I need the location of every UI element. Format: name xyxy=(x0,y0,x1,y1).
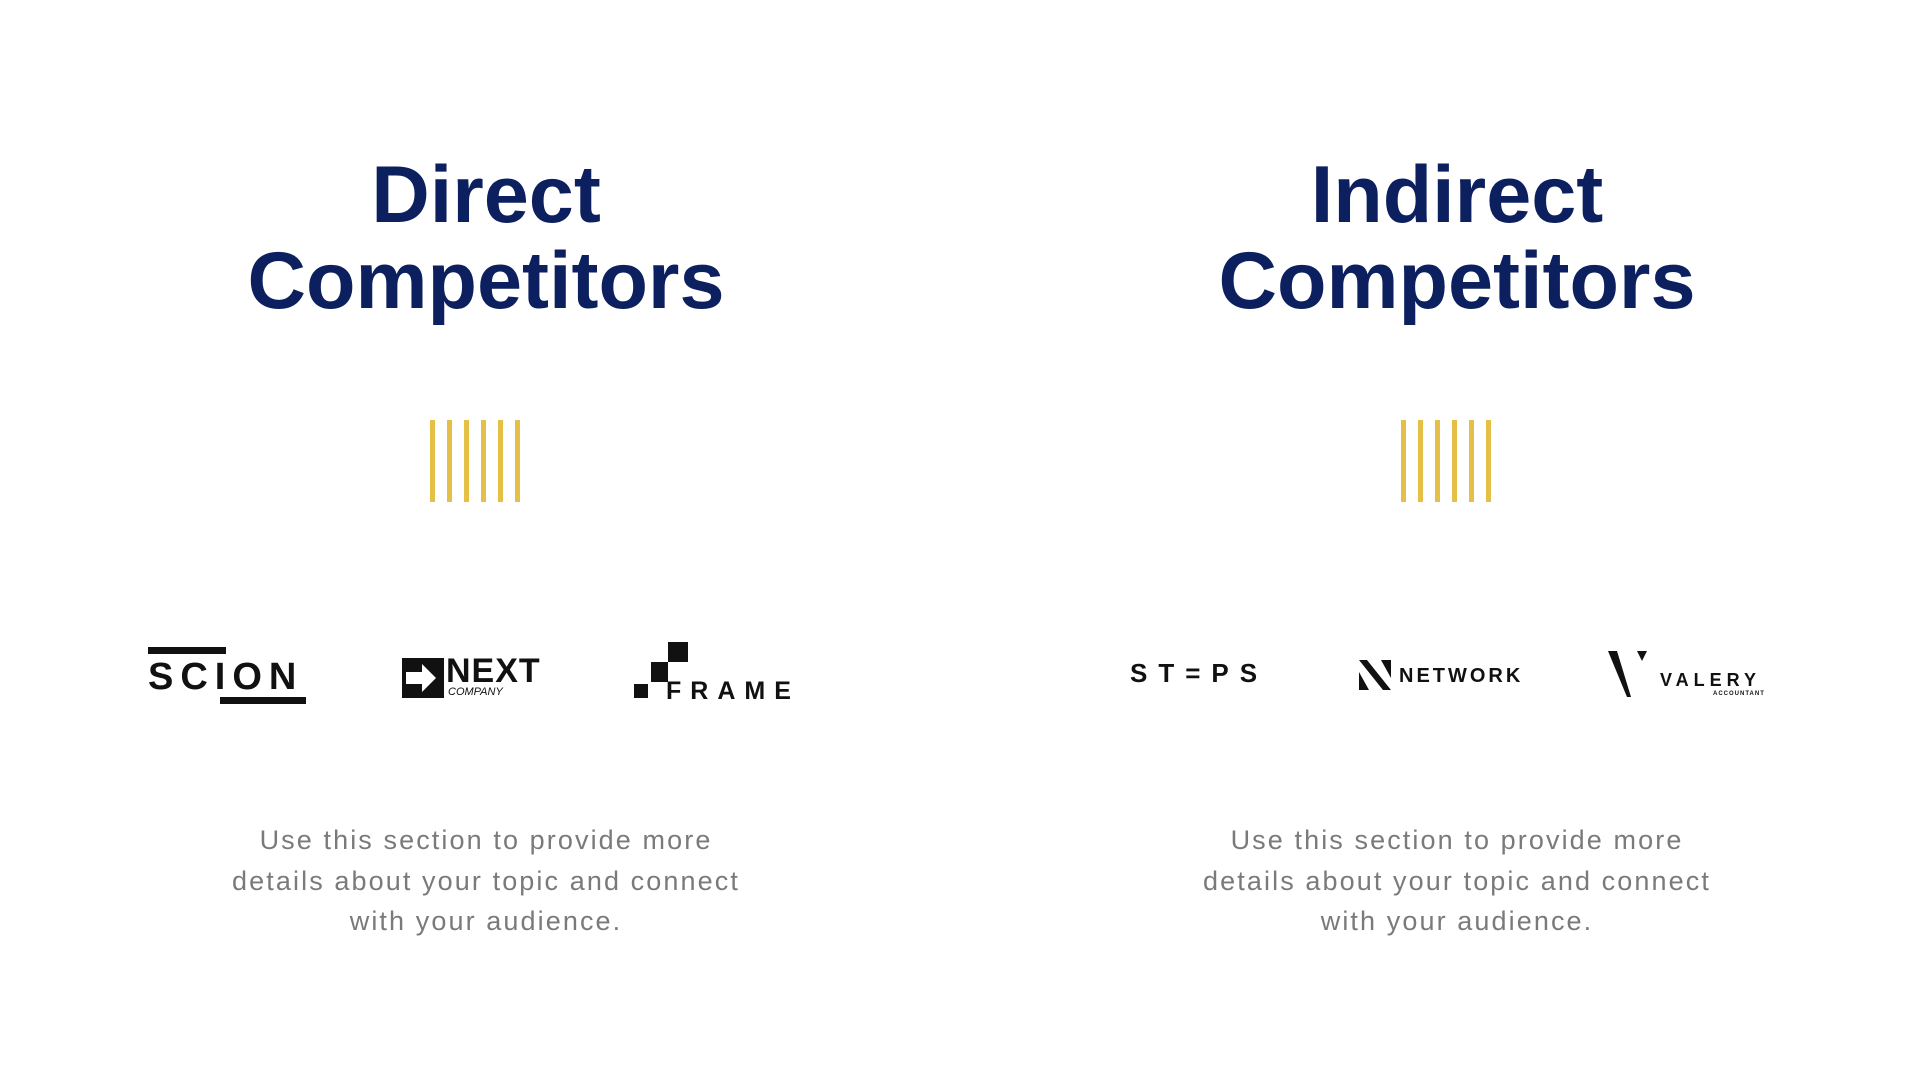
stripes: left xyxy=(430,420,520,502)
logo: next company xyxy=(402,652,541,698)
text: left body: Use this section to provide more xyxy=(260,825,712,855)
logo: frame: FRAME xyxy=(666,677,800,705)
logo: network xyxy=(1359,660,1523,690)
logo: steps: ST=PS xyxy=(1130,658,1268,688)
text: left body xyxy=(232,825,740,936)
text: left body: details about your topic and connect xyxy=(232,866,740,896)
stripes: right xyxy=(1401,420,1491,502)
logo: valery xyxy=(1608,651,1765,697)
logo: frame xyxy=(634,642,800,705)
logo: valery: ACCOUNTANT xyxy=(1713,691,1765,697)
title: direct competitors: Competitors xyxy=(247,236,725,326)
text: right body xyxy=(1203,825,1711,936)
title: indirect competitors: Indirect xyxy=(1311,150,1603,240)
logo: next company: NEXT xyxy=(446,652,541,690)
title: indirect competitors xyxy=(1218,150,1696,326)
logo: next company: COMPANY xyxy=(448,686,503,698)
logo: scion: SCION xyxy=(148,656,303,698)
title: direct competitors: Direct xyxy=(371,150,601,240)
text: right body: details about your topic and connect xyxy=(1203,866,1711,896)
title: indirect competitors: Competitors xyxy=(1218,236,1696,326)
logo: valery: VALERY xyxy=(1660,670,1761,690)
logo: network: NETWORK xyxy=(1399,665,1523,687)
text: right body: with your audience. xyxy=(1321,906,1593,936)
text: right body: Use this section to provide more xyxy=(1231,825,1683,855)
title: direct competitors xyxy=(247,150,725,326)
text: left body: with your audience. xyxy=(350,906,622,936)
